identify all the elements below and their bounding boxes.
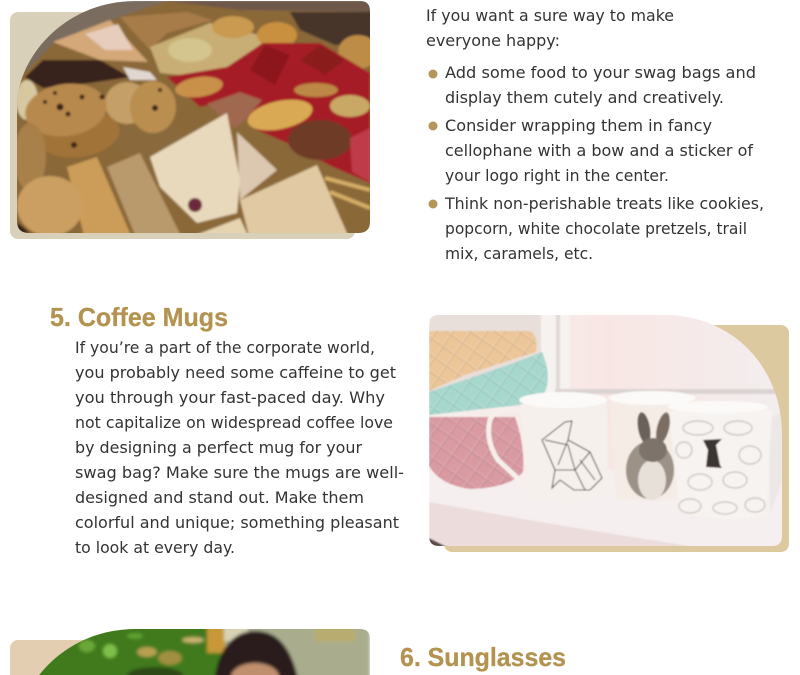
bullet list: food tips: Add some food to your swag bags and: [445, 63, 756, 82]
heading: 5. Coffee Mugs: 5. Coffee Mugs: [50, 302, 228, 332]
mug 3: [668, 401, 783, 519]
bullet list: food tips: [428, 63, 764, 263]
photo backing: food: [10, 12, 355, 239]
bullet list: food tips: popcorn, white chocolate pretzels, trail: [445, 219, 747, 238]
photo: cookies and pastries: [10, 0, 378, 245]
photo backing: mugs: [444, 325, 789, 552]
heading: 6. Sunglasses: 6. Sunglasses: [400, 642, 566, 672]
biscuits: [17, 153, 183, 240]
mug 1: [489, 392, 608, 502]
scones: [17, 113, 370, 240]
bullet list: food tips: cellophane with a bow and a sticker of: [445, 141, 753, 160]
text block: coffee mugs: colorful and unique; something pleasant: [75, 513, 399, 532]
bullet list: food tips: display them cutely and creatively.: [445, 88, 724, 107]
intro text: If you want a sure way to make: [426, 6, 674, 25]
panel: sunglasses photo with tan backing: [10, 625, 370, 675]
mug 2: [609, 391, 697, 501]
photo backing: sunglasses: [10, 640, 355, 675]
bullet list: food tips: your logo right in the center.: [445, 166, 669, 185]
text block: coffee mugs: not capitalize on widespread coffee love: [75, 413, 393, 432]
bullet list: food tips: Consider wrapping them in fancy: [445, 116, 712, 135]
text block: coffee mugs: designed and stand out. Make them: [75, 488, 364, 507]
text block: coffee mugs: to look at every day.: [75, 538, 235, 557]
photo: woman in sunglasses: [39, 629, 370, 675]
text block: intro and treat tips: [426, 6, 764, 263]
photo: rabbit mugs and bowls: [429, 310, 790, 550]
text block: coffee mugs: by designing a perfect mug for your: [75, 438, 362, 457]
panel: food photo with tan backing: [10, 0, 378, 245]
text block: coffee mugs: you probably need some caffeine to get: [75, 363, 396, 382]
bowls: [429, 331, 548, 489]
intro text: everyone happy:: [426, 31, 560, 50]
bullet list: food tips: mix, caramels, etc.: [445, 244, 593, 263]
text block: coffee mugs: you through your fast-paced day. Why: [75, 388, 385, 407]
red wrappers and muffins: [167, 43, 370, 183]
panel: mugs photo with tan backing: [429, 310, 790, 552]
cookies: [14, 79, 184, 191]
text block: coffee mugs: If you’re a part of the corporate world,: [75, 338, 375, 357]
text block: coffee mugs: [75, 338, 404, 557]
bullet list: food tips: Think non-perishable treats like cookies,: [444, 194, 764, 213]
intro text: [426, 6, 674, 50]
text block: coffee mugs: swag bag? Make sure the mugs are well-: [75, 463, 404, 482]
